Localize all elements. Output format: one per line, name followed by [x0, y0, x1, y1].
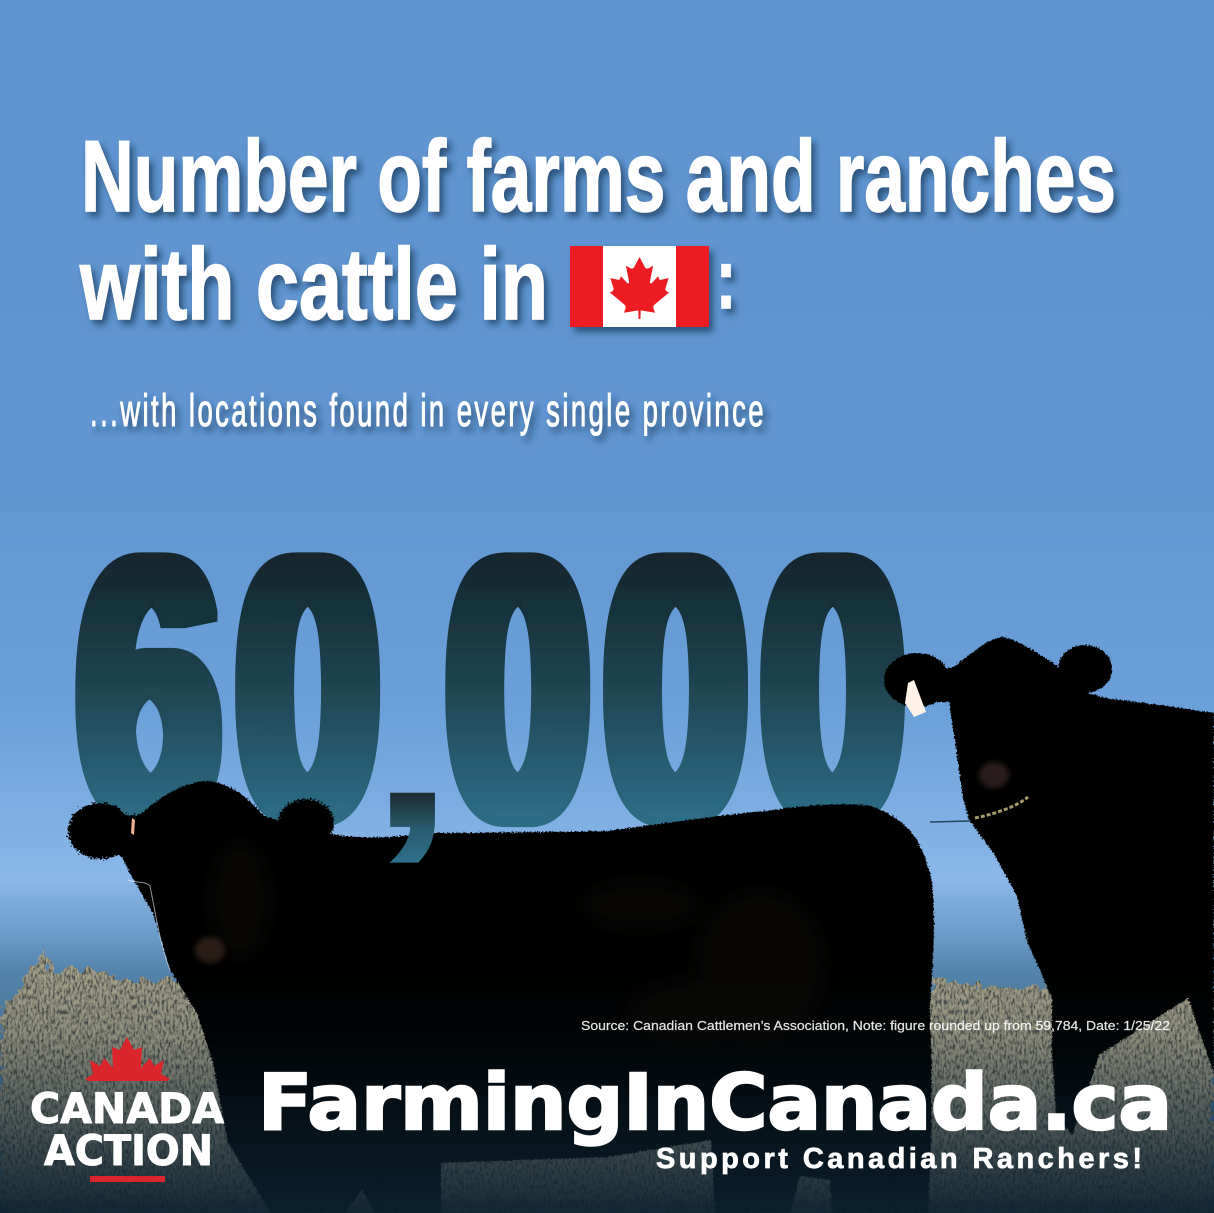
website URL: FarmingInCanada.ca [258, 1059, 1172, 1148]
cow left: coat shading [210, 840, 825, 1040]
comma of big number: , [368, 619, 456, 876]
logo word: CANADA: CANADA [30, 1084, 224, 1133]
bottom dark fade [0, 960, 1214, 1213]
fence wire [930, 821, 970, 822]
logo red bar [90, 1176, 165, 1182]
big number: 60,000: 60, 000 [78, 479, 904, 898]
subtitle: ...with locations found in every single province [90, 385, 766, 436]
cow right: nose [979, 762, 1009, 788]
cow left: ear tag [131, 818, 135, 835]
cow: left [68, 781, 934, 1213]
cow right: body [948, 637, 1214, 1135]
source note: Source: Canadian Cattlemen’s Association, Note: figure rounded up from 59,784, Date: 1/25/22 [581, 1019, 1170, 1033]
logo: Canada Action [30, 1037, 224, 1182]
cow right: ears [884, 645, 1112, 707]
tagline: Support Canadian Ranchers! [656, 1143, 1142, 1175]
cow left: rim light [128, 880, 170, 970]
cow left: ears [68, 799, 334, 859]
title [79, 121, 1116, 341]
title line 2: with cattle in [79, 229, 548, 341]
logo maple leaf [85, 1037, 170, 1081]
cow left: nose [195, 937, 225, 963]
icon: Canadian flag [570, 246, 709, 327]
grass field [0, 948, 1214, 1213]
cow left: body [118, 781, 934, 1213]
logo word: ACTION: ACTION [44, 1126, 213, 1175]
title colon: : [716, 232, 736, 327]
cow: right [884, 637, 1214, 1135]
cow right: halter [975, 797, 1028, 818]
cow right: ear tag [905, 680, 926, 717]
